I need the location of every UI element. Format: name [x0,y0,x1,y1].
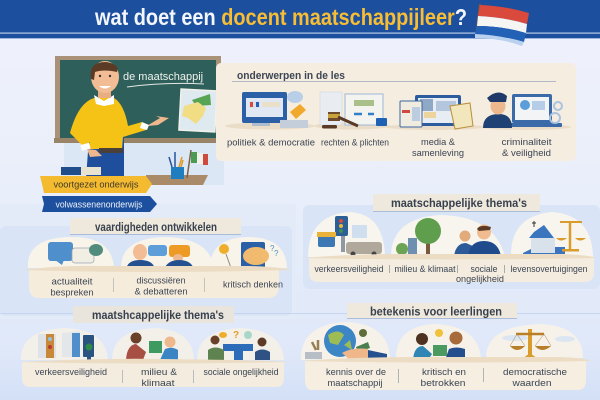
ribbon: voortgezet onderwijs: voortgezet onderwijs [54,180,139,190]
icon: kritisch denken [210,237,287,270]
icon: levensovertuigingen [511,212,593,257]
heading: vaardigheden ontwikkelen [95,220,217,234]
heading [70,218,241,235]
ribbon: voortgezet onderwijs [40,176,152,193]
label card [300,357,591,390]
icon: verkeersveiligheid [308,212,385,257]
map [179,89,217,132]
heading [373,194,540,212]
label: levensovertuigingen [510,264,588,275]
heading: betekenis voor leerlingen [370,304,502,318]
label: milieu & [141,367,178,378]
label: democratische [503,367,567,378]
label card [303,254,596,282]
icon: actualiteit bespreken [28,237,114,268]
panel: vaardigheden ontwikkelen [22,218,292,298]
label: maatschappij [328,378,382,389]
icon: kritisch denken: ? [274,249,279,258]
panel: maatschappelijke thema's left [18,306,290,389]
icon: sociale ongelijkheid: ? [233,330,239,341]
label: actualiteit [52,276,93,288]
ribbon: volwassenenonderwijs [42,196,157,212]
icon: rechten & plichten [314,92,390,130]
label card [18,359,290,387]
panel: maatschappelijke thema's right [303,194,600,289]
label: ongelijkheid [456,274,504,285]
label: klimaat [142,378,175,389]
label: kritisch denken [223,280,283,290]
icon: kritisch en betrokken [396,324,481,360]
panel: onderwerpen in de les [216,63,576,161]
label: & debatteren [134,286,188,298]
label: waarden [511,378,552,389]
label: samenleving [412,148,464,159]
icon: milieu & klimaat [391,215,505,257]
label card [22,266,292,298]
icon: discussiëren [121,237,214,269]
label: verkeersveiligheid [35,367,107,378]
label: milieu & klimaat [394,264,456,275]
icon: criminaliteit & veiligheid [479,92,571,130]
icon: verkeersveiligheid [21,328,108,363]
chalkboard [54,56,223,143]
teacher [70,61,169,178]
heading: onderwerpen in de les [237,70,345,82]
label: bespreken [50,288,94,298]
title: wat doet een docent maatschappijleer? [94,4,467,30]
icon: media & samenleving [385,95,485,130]
label: betrokken [420,378,466,389]
icon: milieu & klimaat [112,328,194,360]
label: sociale ongelijkheid [204,367,278,378]
heading: maatshcappelijke thema's [92,308,224,322]
label: criminaliteit [502,137,552,148]
header banner [0,0,600,39]
label: kritisch en [422,367,466,378]
label: sociale [470,264,498,275]
chalkboard title: de maatschappij [123,71,203,83]
label: rechten & plichten [321,138,389,148]
label: media & [421,137,456,148]
desk with pencil cup, flag and books [61,150,208,185]
teacher illustration: classroom [54,56,224,185]
label: politiek & democratie [227,138,315,148]
icon: democratische waarden [486,324,583,359]
icon: Dutch flag [475,4,529,46]
heading: maatschappelijke thema's [391,196,527,210]
ribbon: volwassenenonderwijs: volwassenenonderwijs [56,200,143,210]
icon: sociale ongelijkheid [197,328,284,360]
label: verkeersveiligheid [314,264,384,275]
label: discussiëren [136,276,186,286]
icon: kritisch denken: ? [270,244,275,253]
label: kennis over de [326,367,386,378]
icon: kennis over de maatschappij [301,322,390,361]
icon: politiek & democratie [225,91,315,130]
label: & veiligheid [502,148,551,159]
panel: betekenis voor leerlingen [300,303,591,390]
